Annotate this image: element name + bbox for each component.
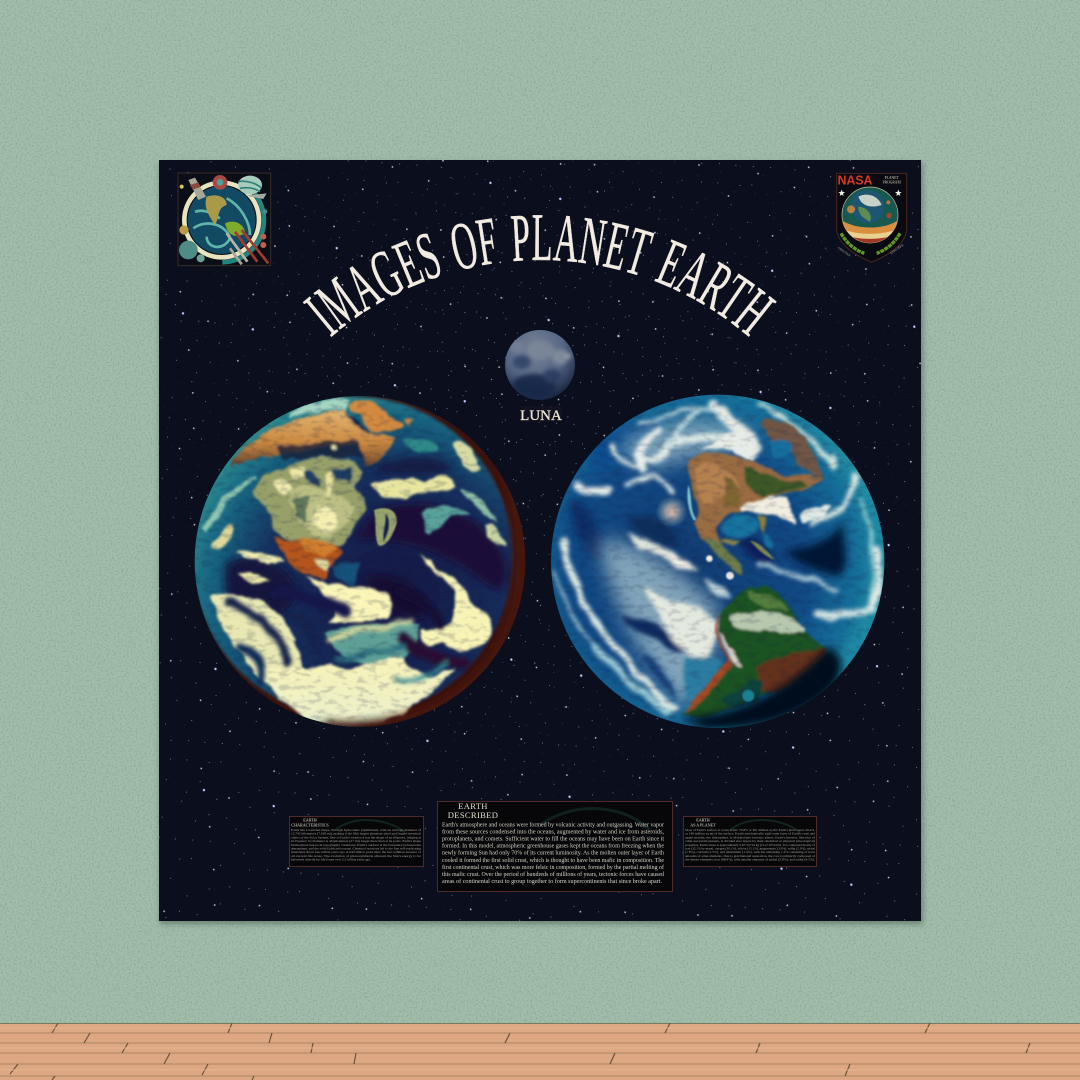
badge bottom labels: FRONTIER xyxy=(837,246,851,258)
left globe lower-left cream swirl base xyxy=(210,593,420,683)
characteristics heading xyxy=(291,818,329,828)
characteristics paragraph: all current life arose. The evolution of photosynthesis allowed the Sun's energy to be xyxy=(291,854,422,858)
planet program label: PLANET xyxy=(885,176,899,180)
left globe Madagascar xyxy=(374,508,397,546)
left mission logo xyxy=(178,172,272,266)
right NASA mission badge xyxy=(837,173,907,262)
planet paragraph: other terrestrial planets, is divided into layers by their chemical or physical (rheological) xyxy=(685,839,815,844)
planet paragraph xyxy=(685,828,816,863)
characteristics paragraph: 12,742 kilometers (7,918 mi), making it the fifth largest planetary sized and largest terrestrial xyxy=(291,832,421,837)
characteristics paragraph: harvested directly by life forms over 2.5 billion years ago. xyxy=(291,858,371,862)
logo rocket xyxy=(188,178,206,200)
described paragraph: from these sources condensed into the oceans, augmented by water and ice from asteroids, xyxy=(442,828,664,835)
right globe pale cloud mass xyxy=(620,533,732,703)
right globe South America xyxy=(682,587,828,715)
left Earth globe: Africa view xyxy=(194,396,526,727)
described paragraph: Earth's atmosphere and oceans were formed by volcanic activity and outgassing. Water vapor xyxy=(442,821,665,828)
planet paragraph: or 149 million sq mi of the surface. Earth's mechanically rigid outer layer of Earth's crust and xyxy=(685,832,815,836)
described paragraph: protoplanets, and comets. Sufficient water to fill the oceans may have been on Earth since it xyxy=(442,836,664,842)
right globe teal spot in Patagonia xyxy=(742,690,754,702)
described paragraph: newly forming Sun had only 70% of its current luminosity. As the molten outer layer of Earth xyxy=(442,850,665,857)
planet paragraph: Most of Earth's surface is ocean water: 70.8% or 361 million sq mi. Earth's land covers 29.2%, xyxy=(685,828,815,833)
left globe central Africa xyxy=(252,458,365,547)
poster shadow xyxy=(160,163,923,924)
left globe dark navy ocean xyxy=(225,457,507,624)
characteristics paragraph: Earth has a rounded shape, through hydrostatic equilibrium, with an average diameter of xyxy=(291,828,422,833)
moon label: LUNA xyxy=(520,408,562,424)
logo globe xyxy=(188,186,256,254)
described paragraph: formed. In this model, atmospheric greenhouse gases kept the oceans from freezing when the xyxy=(442,843,664,850)
left globe upper sandy deserts xyxy=(228,400,417,468)
logo globe swirls xyxy=(193,198,250,247)
planet paragraph: the denser elements: iron (88.8%), with smaller amounts of nickel (5.8%), and sulfur (4.5%). xyxy=(685,858,815,863)
right globe eastern curved clouds xyxy=(758,477,880,616)
right Earth globe: Americas view xyxy=(545,390,892,733)
described paragraph: areas of continental crust to group together to form supercontinents that since broke apart. xyxy=(442,878,662,885)
right globe northern swirling clouds xyxy=(580,403,835,490)
logo globe land xyxy=(206,195,227,225)
right NASA mission badge: PROGRAM xyxy=(883,180,901,184)
left globe fine texture xyxy=(195,396,504,724)
planet paragraph: upper mantle, the lithosphere, is divided into tectonic plates. Earth's interior, like that of xyxy=(685,835,816,840)
planet heading: EARTH xyxy=(696,818,710,822)
logo ringed planet xyxy=(238,176,267,199)
logo outer teal arc xyxy=(164,162,279,278)
wooden floor xyxy=(0,1023,1080,1080)
characteristics paragraph: atmosphere, and the solid Earth and oceans. Chemical reactions led to the first self-replicating xyxy=(291,846,421,852)
right globe Caribbean islands and clouds xyxy=(687,485,775,580)
right globe teal eastern rim xyxy=(823,493,884,690)
badge earth xyxy=(851,190,884,223)
logo ring xyxy=(184,183,259,257)
logo small planets xyxy=(179,185,267,262)
badge stars xyxy=(838,190,902,196)
characteristics heading: CHARACTERISTICS xyxy=(291,822,329,828)
right globe dark ocean patches xyxy=(568,421,846,577)
characteristics paragraph: molecules about four billion years ago. A half-billion years later, the last common ancestor of xyxy=(291,850,422,855)
left globe ocean disc xyxy=(192,396,513,717)
left globe southern Africa xyxy=(273,537,360,587)
planet paragraph: properties. Earth's mass is approximately 5.97×10^24 kg (13.2×10^24 lb). It is composed mostly of xyxy=(685,843,816,847)
left globe terminator shadow xyxy=(319,476,526,726)
right NASA mission badge: EXPLORER xyxy=(889,243,904,255)
planet paragraph: amounts of other elements. Due to gravitational separation, the core is primarily composed of xyxy=(685,854,816,859)
title: IMAGES OF PLANET EARTH xyxy=(302,215,777,337)
badge laurels xyxy=(841,233,900,253)
characteristics heading: EARTH xyxy=(303,818,317,822)
right globe dark southeastern limb xyxy=(682,647,841,729)
right globe broad cloud haze xyxy=(598,420,752,707)
described heading: EARTH xyxy=(458,801,488,811)
described paragraph xyxy=(442,821,665,885)
right globe sun glint xyxy=(656,497,686,526)
described paragraph: this mafic crust. Over the period of hundreds of millions of years, tectonic forces have caused xyxy=(442,871,665,878)
left globe bright cloud swathes xyxy=(203,437,505,654)
described heading: DESCRIBED xyxy=(448,810,498,820)
text box: Earth described xyxy=(438,801,672,892)
right globe left-edge cloud streaks xyxy=(553,540,673,713)
left globe bottom polar cloud mass xyxy=(257,657,457,730)
described heading xyxy=(448,801,498,820)
left globe swirling storm bands xyxy=(230,590,463,681)
logo rockets lower right xyxy=(227,230,268,264)
characteristics paragraph: its Equator; its diameter is 43 kilometers (27 mi) longer there than at its poles. Earth's shape xyxy=(291,839,422,843)
characteristics paragraph: furthermore has local topography variations. Earth's surface is the boundary between the xyxy=(291,843,422,847)
characteristics paragraph xyxy=(291,828,422,862)
badge ground bands xyxy=(842,220,898,243)
right globe North America xyxy=(689,421,825,576)
right globe cloud over eastern North America xyxy=(702,432,832,525)
text box: Earth as a planet xyxy=(684,816,816,866)
right globe fine texture xyxy=(545,390,892,733)
moon illustration xyxy=(505,330,575,400)
described paragraph: first continental crust, which was more felsic in composition, formed by the partial melting of xyxy=(442,864,665,871)
planet heading: AS A PLANET xyxy=(690,822,716,828)
text box: Earth characteristics xyxy=(290,816,424,866)
right globe Gulf and Caribbean xyxy=(720,515,773,550)
badge small planets xyxy=(847,205,855,213)
planet heading xyxy=(690,818,716,828)
logo red planet xyxy=(213,175,227,190)
characteristics paragraph: object of the Solar System. Due to Earth's rotation it has the shape of an ellipsoid, bulging at xyxy=(291,835,421,840)
planet paragraph: (1.8%), calcium (1.5%), and aluminium (1.4%), with the remaining 1.2% consisting of trace xyxy=(685,850,816,855)
poster panel: starfield background xyxy=(159,160,921,921)
planet paragraph: iron (32.1% by mass), oxygen (30.1%), silicon (15.1%), magnesium (13.9%), sulfur (2.9%), nickel xyxy=(685,846,815,852)
NASA wordmark: NASA xyxy=(838,173,872,187)
badge circle scene xyxy=(842,187,898,243)
described paragraph: cooled it formed the first solid crust, which is thought to have been mafic in composition. The xyxy=(442,857,664,864)
